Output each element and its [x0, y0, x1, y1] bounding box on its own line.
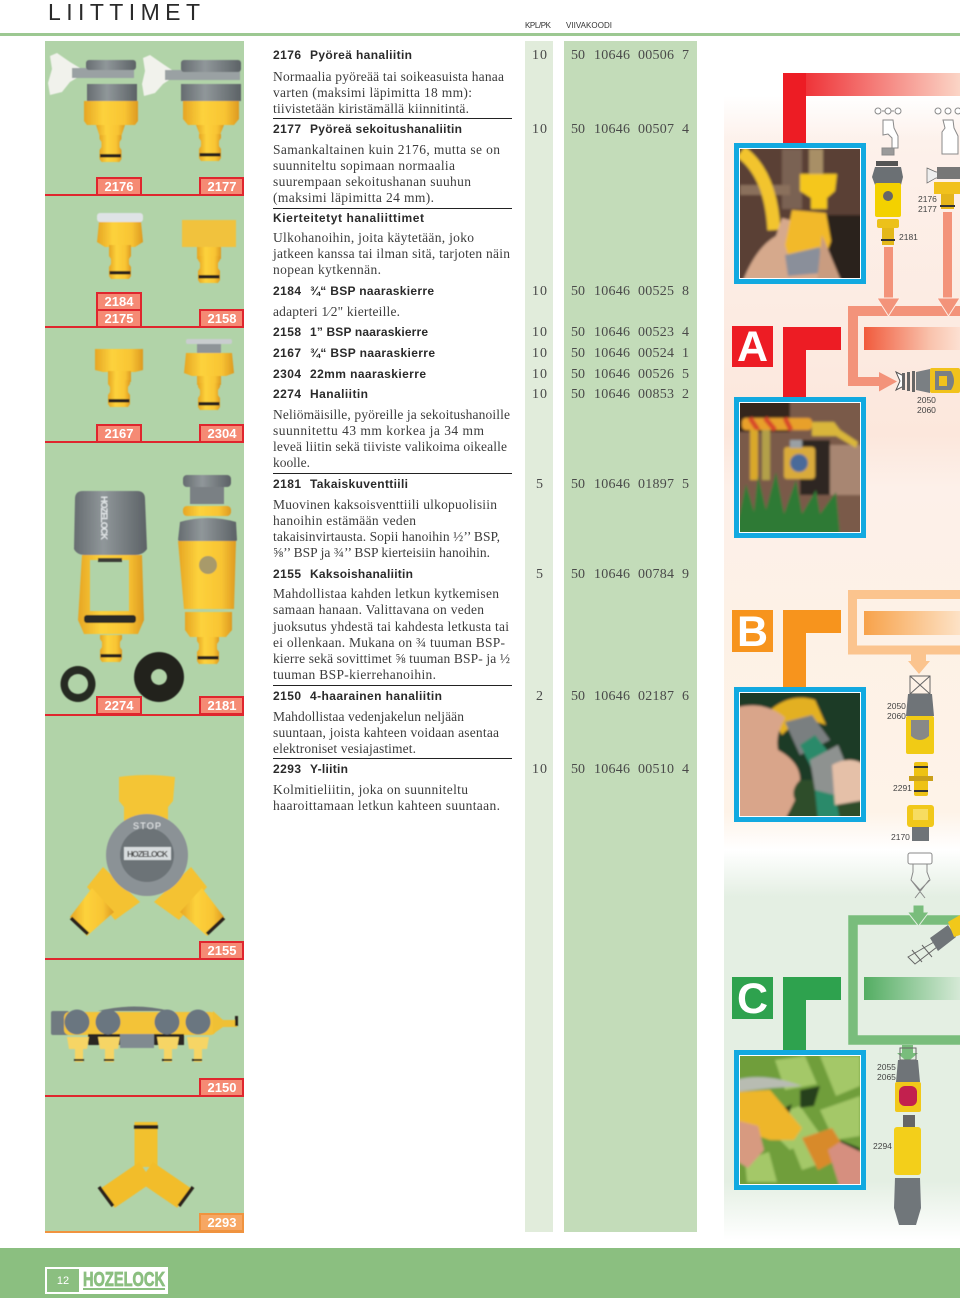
- arrow C top: [908, 905, 929, 926]
- product text: 2155: Kaksoishanaliitin: [310, 567, 413, 581]
- product drawing: 2294: [894, 1115, 921, 1225]
- order data: 2304: 10646: [594, 367, 630, 382]
- product text: threaded connectors: Kierteitetyt hanaliittimet: [273, 211, 424, 225]
- label 2175: [97, 310, 141, 327]
- order data: 2184: 10646: [594, 284, 630, 299]
- product text: threaded connectors: nopean kytkennän.: [273, 262, 381, 277]
- product text: 2274: suunnitettu 43 mm korkea ja 34 mm: [273, 423, 484, 438]
- order data: 2150: 2: [536, 689, 543, 704]
- product text: 2274: Hanaliitin: [310, 387, 368, 401]
- order data: 2158: [532, 325, 689, 340]
- product text: 2184: [273, 284, 434, 319]
- product text: 2150: 4-haarainen hanaliitin: [310, 689, 442, 703]
- order data: 2150: 10646: [594, 689, 630, 704]
- product text: 2304: 2304: [273, 367, 301, 381]
- order data: 2177: 4: [682, 122, 689, 137]
- order data: 2184: [532, 284, 689, 299]
- order data: 2155: 5: [536, 567, 543, 582]
- order data: 2155: 00784: [638, 567, 674, 582]
- caption 2294: 2294: [873, 1141, 892, 1151]
- footer: page number and logo: HOZELOCK: [83, 1269, 165, 1291]
- product text: 2184: 2184: [273, 284, 301, 298]
- order data: 2293: 50: [571, 762, 585, 777]
- product text: 2167: ¾“ BSP naaraskierre: [310, 346, 435, 360]
- product 2176: [48, 53, 138, 162]
- order data: 2181: 10646: [594, 477, 630, 492]
- caption 2176 2177: [918, 194, 937, 214]
- product drawing: hose connector diagonal: [908, 915, 960, 964]
- product text: 2150: suuntaan, joista kahteen voidaan asentaa: [273, 725, 499, 740]
- order data: 2176: [532, 48, 689, 63]
- badge B: B: [737, 608, 768, 656]
- icon: outlet connector outline: [908, 853, 932, 898]
- order data: 2176: 10646: [594, 48, 630, 63]
- order data: 2274: 10: [532, 387, 547, 402]
- order data: 2293: 00510: [638, 762, 674, 777]
- product text: 2304: 22mm naaraskierre: [310, 367, 426, 381]
- product text: 2181: [273, 477, 500, 560]
- order data: 2304: 5: [682, 367, 689, 382]
- product drawing: 2291: [909, 762, 933, 796]
- product 2155: HOZELOCK: [127, 849, 169, 859]
- order data: 2293: 10646: [594, 762, 630, 777]
- product text: 2177: [273, 122, 500, 205]
- product text: 2155: kierre sekä sovittimet ⅝ tuuman BSP- ja ½: [273, 651, 510, 666]
- product 2293: [99, 1122, 193, 1206]
- order data: 2150: 6: [682, 689, 689, 704]
- order data: 2176: 10: [532, 48, 547, 63]
- label 2177: 2177: [208, 179, 236, 194]
- product text: 2155: tuuman BSP-kierrehanoihin.: [273, 667, 436, 682]
- caption 2050 2060: [887, 701, 906, 721]
- label 2184: 2184: [105, 294, 134, 309]
- column header: VIIVAKOODI: VIIVAKOODI: [566, 21, 612, 30]
- product 2155: STOP: [133, 821, 161, 831]
- label 2293: [200, 1214, 243, 1231]
- product drawing: 2170: [907, 805, 934, 841]
- product text: 2181: Muovinen kaksoisventtiili ulkopuolisiin: [273, 497, 497, 512]
- label 2293: 2293: [208, 1215, 236, 1230]
- order data: 2177: 50: [571, 122, 585, 137]
- label 2304: 2304: [208, 426, 237, 441]
- order data: 2150: 02187: [638, 689, 674, 704]
- product 2167: [95, 349, 143, 407]
- order data: 2155: 9: [682, 567, 689, 582]
- caption 2176 2177: 2177: [918, 204, 937, 214]
- product 2155: [70, 775, 224, 936]
- gradient bar C: [864, 977, 960, 1000]
- product text: 2274: Neliömäisille, pyöreille ja sekoitushanoille: [273, 407, 510, 422]
- order data: 2274: [532, 387, 689, 402]
- product text: 2167: 2167: [273, 346, 301, 360]
- product drawing: 2181: [872, 161, 903, 245]
- gradient bar B: [864, 611, 960, 635]
- caption 2176 2177: 2176: [918, 194, 937, 204]
- caption 2055 2065: [877, 1062, 896, 1082]
- order data: 2304: 50: [571, 367, 585, 382]
- product text: 2155: samaan hanaan. Valittavana on veden: [273, 602, 484, 617]
- order data: 2274: 2: [682, 387, 689, 402]
- column: KPL/PK: [525, 41, 553, 1232]
- product text: 2177: 2177: [273, 122, 301, 136]
- order data: 2177: 00507: [638, 122, 674, 137]
- order data: 2177: 10: [532, 122, 547, 137]
- product text: 2176: 2176: [273, 48, 301, 62]
- product text: 2274: 2274: [273, 387, 301, 401]
- product drawing: 2055/2065: [895, 1048, 921, 1112]
- order data: 2177: [532, 122, 689, 137]
- order data: 2274: 00853: [638, 387, 674, 402]
- product 2184: [97, 213, 143, 279]
- product 2304: [184, 339, 234, 410]
- order data: 2293: 4: [682, 762, 689, 777]
- label 2167: [97, 425, 141, 442]
- footer band: [0, 1248, 960, 1298]
- order data: 2158: 10646: [594, 325, 630, 340]
- badge A: A: [737, 323, 768, 371]
- product text: 2177: Pyöreä sekoitushanaliitin: [310, 122, 462, 136]
- header rule: [0, 33, 960, 36]
- product text: 2177: suunniteltu sopimaan normaalia: [273, 158, 455, 173]
- product text: 2155: [272, 567, 510, 682]
- order data: 2177: 10646: [594, 122, 630, 137]
- product text: 2293: Kolmitieliitin, joka on suunniteltu: [273, 782, 468, 797]
- label 2175: 2175: [105, 311, 133, 326]
- salmon pipe from tap products: [848, 212, 960, 392]
- label 2181: [200, 697, 243, 714]
- red connector to photo 1: [783, 73, 960, 143]
- panel: section A: [732, 73, 960, 538]
- product text: 2150: [273, 689, 499, 756]
- product text: 2274: koolle.: [273, 455, 310, 470]
- badge C: C: [737, 975, 768, 1023]
- product text: 2181: Takaiskuventtiili: [310, 477, 408, 491]
- footer: page number and logo: [46, 1268, 168, 1294]
- product text: 2155: Mahdollistaa kahden letkun kytkemisen: [273, 586, 499, 601]
- product text: 2176: [273, 48, 504, 116]
- product 2150: [51, 1006, 238, 1062]
- order data: 2181: [536, 477, 689, 492]
- product text: 2176: tiivistetään kiristämällä kiinnitintä.: [273, 101, 469, 116]
- product text: 2181: 2181: [273, 477, 301, 491]
- caption 2291: 2291: [893, 783, 912, 793]
- order data: 2274: 50: [571, 387, 585, 402]
- product text: threaded connectors: Ulkohanoihin, joita käytetään, joko: [273, 230, 474, 245]
- icon: tap 1: [875, 108, 901, 155]
- product drawing: 2050: [906, 676, 934, 754]
- photo: timer and manifold: [734, 397, 866, 538]
- order data: 2158: 10: [532, 325, 547, 340]
- icon: tap 2: [935, 108, 960, 154]
- order data: 2167: 10646: [594, 346, 630, 361]
- product drawing: 2176/2177: [927, 167, 960, 209]
- red connector to photo 2: [783, 327, 841, 397]
- green connector: [783, 977, 841, 1052]
- product text: 2176: varten (maksimi läpimitta 18 mm):: [273, 85, 472, 100]
- order data: 2304: 10: [532, 367, 547, 382]
- label 2167: 2167: [105, 426, 133, 441]
- caption 2170: 2170: [891, 832, 910, 842]
- product text: 2274: [273, 387, 510, 470]
- order data: 2304: 00526: [638, 367, 674, 382]
- product text: threaded connectors: jatkeen kanssa tai ilman sitä, tarjoten näin: [272, 246, 510, 261]
- panel: product photos: [45, 41, 244, 1233]
- product 2274: HOZELOCK: [99, 496, 109, 540]
- order data: 2158: 4: [682, 325, 689, 340]
- product text: 2177: (maksimi läpimitta 24 mm).: [273, 190, 434, 205]
- product text: 2155: ei ollenkaan. Mukana on ¾ tuuman BSP-: [273, 635, 506, 650]
- label 2176: 2176: [105, 179, 133, 194]
- caption 2050 2060: [917, 395, 936, 415]
- order data: 2181: 01897: [638, 477, 674, 492]
- order data: 2274: 10646: [594, 387, 630, 402]
- order data: 2155: 50: [571, 567, 585, 582]
- order data: 2304: [532, 367, 689, 382]
- product text: 2184: ¾“ BSP naaraskierre: [310, 284, 434, 298]
- product text: 2177: suurempaan sekoitushanan suuhun: [273, 174, 471, 189]
- product 2177: [142, 55, 241, 161]
- order data: 2167: 10: [532, 346, 547, 361]
- arrow C bottom: [897, 1045, 918, 1062]
- order data: 2167: 1: [682, 346, 689, 361]
- order data: 2181: 5: [682, 477, 689, 492]
- order data: 2176: 50: [571, 48, 585, 63]
- product 2158: [182, 220, 236, 283]
- column header: KPL/PK: KPL/PK: [525, 21, 552, 30]
- panel: section C: [732, 905, 960, 1225]
- arrow B: [908, 654, 930, 674]
- order data: 2158: 50: [571, 325, 585, 340]
- order data: 2181: 5: [536, 477, 543, 492]
- product text: 2150: elektroniset vesiajastimet.: [273, 741, 416, 756]
- caption 2055 2065: 2065: [877, 1072, 896, 1082]
- product text: 2293: [273, 762, 500, 813]
- order data: 2155: [536, 567, 689, 582]
- product 2274: [61, 491, 184, 702]
- product text: 2176: Pyöreä hanaliitin: [310, 48, 412, 62]
- gradient bar A: [864, 327, 960, 350]
- footer: page number and logo: 12: [57, 1275, 69, 1287]
- label 2158: 2158: [208, 311, 236, 326]
- label 2176: [97, 178, 141, 195]
- label 2155: 2155: [208, 943, 236, 958]
- product text: 2150: 2150: [273, 689, 301, 703]
- label 2274: [97, 697, 141, 714]
- label 2181: 2181: [208, 698, 236, 713]
- product text: threaded connectors: [272, 211, 510, 277]
- product text: 2181: ⅝’’ BSP ja ¾’’ BSP kierteisiin hanoihin.: [273, 545, 490, 560]
- order data: 2181: 50: [571, 477, 585, 492]
- label 2150: [200, 1079, 243, 1096]
- label 2150: 2150: [208, 1080, 236, 1095]
- caption 2050 2060: 2060: [887, 711, 906, 721]
- order data: 2184: 8: [682, 284, 689, 299]
- column: VIIVAKOODI: [564, 41, 697, 1232]
- product text: 2293: haaroittamaan letkun kahteen suuntaan.: [273, 798, 500, 813]
- product text: 2181: hanoihin estämään veden: [273, 513, 416, 528]
- product text: 2158: 1” BSP naaraskierre: [310, 325, 428, 339]
- product text: 2293: Y-liitin: [310, 762, 348, 776]
- pale orange frame: [852, 594, 960, 650]
- label 2155: [200, 942, 243, 959]
- product text: 2181: takaisinvirtausta. Sopii hanoihin ½’’ BSP,: [273, 529, 500, 544]
- product text: 2155: juoksutus yhdestä tai kahdesta letkusta tai: [272, 619, 509, 634]
- caption 2050 2060: 2050: [917, 395, 936, 405]
- product drawing: 2050 horizontal: [896, 368, 960, 393]
- panel: section B: [732, 594, 960, 898]
- order data: 2158: 00523: [638, 325, 674, 340]
- green frame: [853, 920, 960, 1040]
- product text: 2274: leveä liitin sekä tiiviste valikoima oikealle: [273, 439, 507, 454]
- order data: 2167: 50: [571, 346, 585, 361]
- product text: 2155: 2155: [273, 567, 301, 581]
- order data: 2184: 50: [571, 284, 585, 299]
- product text: 2150: Mahdollistaa vedenjakelun neljään: [273, 709, 464, 724]
- order data: 2176: 7: [682, 48, 689, 63]
- order data: 2293: [532, 762, 689, 777]
- product 2181: [178, 475, 237, 664]
- product text: 2176: Normaalia pyöreää tai soikeasuista hanaa: [273, 69, 504, 84]
- order data: 2150: [536, 689, 689, 704]
- photo: tap connector: [734, 143, 866, 284]
- caption 2181: 2181: [899, 232, 918, 242]
- order data: 2293: 10: [532, 762, 547, 777]
- order data: 2167: [532, 346, 689, 361]
- product text: 2158: 2158: [273, 325, 301, 339]
- orange connector: [783, 610, 841, 688]
- photo: hose connector: [734, 687, 866, 822]
- caption 2050 2060: 2060: [917, 405, 936, 415]
- order data: 2155: 10646: [594, 567, 630, 582]
- label 2274: 2274: [105, 698, 134, 713]
- caption 2055 2065: 2055: [877, 1062, 896, 1072]
- label 2158: [200, 310, 243, 327]
- product text: 2184: adapteri 1⁄2" kierteille.: [273, 304, 400, 319]
- label 2184: [97, 293, 141, 310]
- order data: 2167: 00524: [638, 346, 674, 361]
- product text: 2293: 2293: [273, 762, 301, 776]
- order data: 2184: 10: [532, 284, 547, 299]
- photo: spray nozzle: [734, 1050, 866, 1190]
- order data: 2176: 00506: [638, 48, 674, 63]
- order data: 2184: 00525: [638, 284, 674, 299]
- label 2177: [200, 178, 243, 195]
- caption 2050 2060: 2050: [887, 701, 906, 711]
- product text: 2177: Samankaltainen kuin 2176, mutta se on: [273, 142, 500, 157]
- label 2304: [200, 425, 243, 442]
- panel: section backgrounds: [724, 96, 960, 1240]
- order data: 2150: 50: [571, 689, 585, 704]
